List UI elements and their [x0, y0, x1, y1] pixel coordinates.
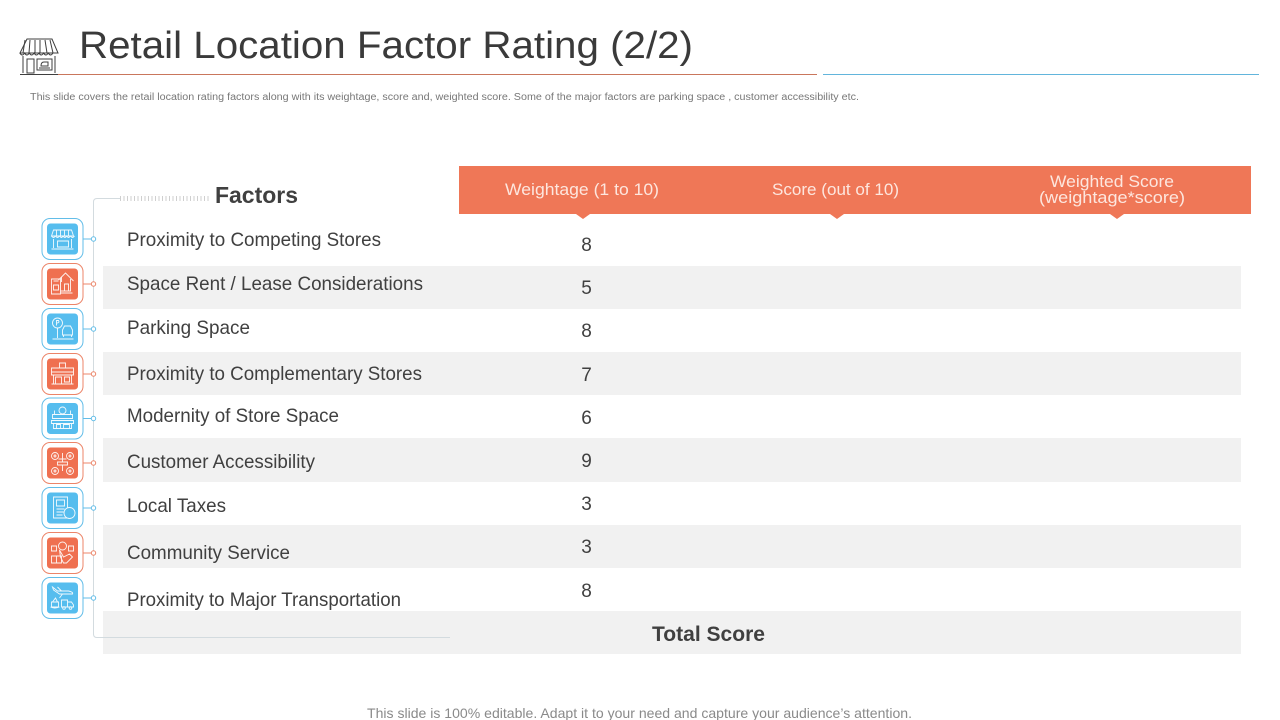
factor labels: Local Taxes [127, 495, 226, 517]
weightage values: 7 [581, 365, 592, 386]
weightage values: 8 [581, 235, 592, 256]
icon: competing stores [42, 218, 83, 260]
weightage values: 3 [581, 537, 592, 558]
table header bar: Weighted Score [1050, 172, 1174, 191]
title underline: blue [823, 74, 1259, 75]
factor labels: Proximity to Major Transportation [127, 589, 401, 611]
title: Retail Location Factor Rating (2/2) [79, 25, 693, 67]
table header bar [459, 166, 1251, 219]
weightage values: 9 [581, 451, 592, 472]
factor labels: Community Service [127, 542, 290, 564]
weightage values [581, 235, 592, 602]
weightage values: 6 [581, 408, 592, 429]
factor labels: Space Rent / Lease Considerations [127, 273, 423, 295]
heading: Factors: Factors [215, 182, 298, 208]
icon: major transportation [42, 578, 83, 618]
icon: community service [42, 532, 83, 574]
total score label: Total Score [652, 623, 765, 646]
table header bar: Score (out of 10) [772, 180, 899, 199]
connector frame [83, 198, 450, 638]
icon: parking space [42, 308, 83, 350]
weightage values: 3 [581, 494, 592, 515]
icon: rent and lease [42, 264, 83, 304]
factor labels: Customer Accessibility [127, 451, 315, 473]
factor labels: Modernity of Store Space [127, 405, 339, 427]
table row bands [103, 266, 1241, 654]
title underline: orange [58, 74, 817, 75]
weightage values: 8 [581, 321, 592, 342]
factor labels: Proximity to Complementary Stores [127, 363, 422, 385]
table header bar: (weightage*score) [1039, 188, 1185, 207]
subtitle description: This slide covers the retail location rating factors along with its weightage, score and, weighted score. Some of the major factors are parking space , customer accessibility etc. [30, 92, 859, 103]
weightage values: 8 [581, 581, 592, 602]
icon: local taxes [42, 488, 83, 528]
factor labels: Proximity to Competing Stores [127, 229, 381, 251]
icon: customer accessibility [42, 442, 83, 484]
weightage values: 5 [581, 278, 592, 299]
icon: modern store [42, 398, 83, 439]
table header bar: Weightage (1 to 10) [505, 180, 659, 199]
factor labels [127, 229, 423, 611]
factor labels: Parking Space [127, 317, 250, 339]
icon: complementary stores [42, 354, 83, 394]
icon: storefront header [20, 39, 58, 74]
